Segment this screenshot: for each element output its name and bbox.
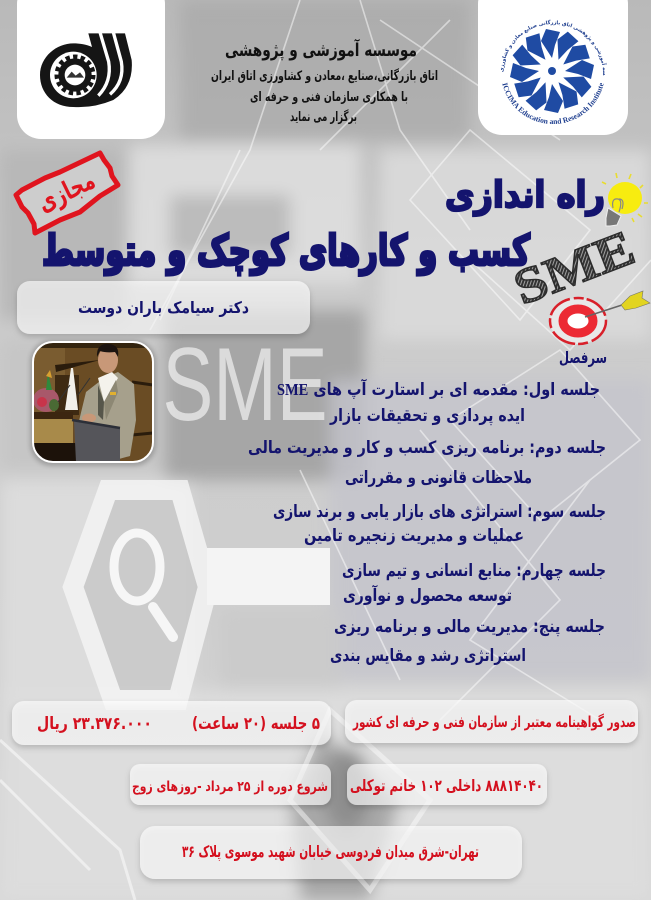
panel: contact phone: ۸۸۸۱۴۰۴۰ داخلی ۱۰۲ خانم توکلی (350, 776, 543, 795)
panel: start date (130, 764, 331, 805)
session 2 second line: ملاحظات قانونی و مقرراتی (345, 468, 532, 488)
session 3 second line: عملیات و مدیریت زنجیره تامین (304, 526, 524, 546)
icon: ICCIMA institute logo: ICCIMA Education and Research Institute (502, 82, 604, 124)
icon: technical organization logo (40, 32, 132, 107)
icon: ICCIMA institute logo (500, 20, 607, 124)
panel: right logo card (478, 0, 628, 135)
panel: address: تهران-شرق میدان فردوسی خیابان شهید موسوی پلاک ۳۶ (182, 842, 479, 862)
session 4 second line: توسعه محصول و نوآوری (343, 584, 512, 606)
heading: course title line one: راه اندازی (445, 175, 605, 216)
label: syllabus: سرفصل (559, 348, 607, 367)
stamp: virtual: مجازی (33, 165, 100, 219)
icon: light bulb (602, 173, 648, 226)
panel: contact phone (347, 764, 547, 805)
panel: duration and price: ۵ جلسه (۲۰ ساعت) (192, 714, 320, 734)
session 5 second line: استراتژی رشد و مقایس بندی (330, 646, 526, 666)
image: instructor photo (30, 340, 156, 466)
stamp: virtual (16, 153, 118, 233)
panel: instructor name (17, 281, 310, 334)
icon: target with arrow (550, 291, 650, 344)
graphic: SME lettering: SME (506, 219, 642, 315)
session 5: جلسه پنج: مدیریت مالی و برنامه ریزی (334, 617, 605, 637)
panel: duration and price: ۲۳.۳۷۶.۰۰۰ ریال (37, 714, 152, 734)
background hexagon with magnifier (73, 490, 330, 700)
session 1: جلسه اول: مقدمه ای بر استارت آپ های SME (277, 378, 600, 400)
text: in cooperation with: با همکاری سازمان فنی و حرفه ای (250, 90, 408, 105)
session 1 second line: ایده پردازی و تحقیقات بازار (329, 406, 525, 426)
panel: left logo card (17, 0, 165, 139)
panel: address (140, 826, 522, 879)
panel: instructor name: دکتر سیامک باران دوست (78, 298, 249, 317)
background: SME (162, 327, 328, 443)
heading: institute name: موسسه آموزشی و پژوهشی (225, 38, 417, 61)
panel: start date: شروع دوره از ۲۵ مرداد -روزهای زوج (132, 779, 328, 795)
panel: duration and price (12, 701, 331, 745)
panel: certificate (345, 700, 638, 743)
text: chamber of commerce: اتاق بازرگانی،صنایع ،معادن و کشاورزی اتاق ایران (211, 68, 438, 84)
text: organizes: برگزار می نماید (290, 109, 357, 125)
list: session topics (248, 378, 606, 666)
